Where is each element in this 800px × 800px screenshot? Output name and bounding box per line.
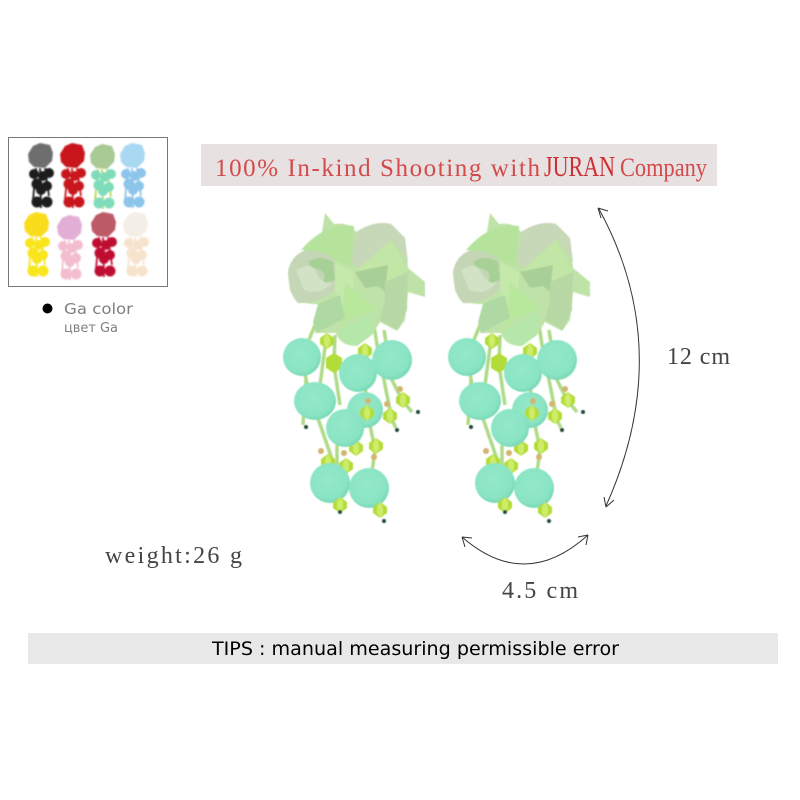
arrow: width arc	[462, 535, 588, 564]
thumbnail: black earring	[28, 143, 54, 208]
weight label: weight:26 g	[105, 543, 242, 569]
thumbnail: blue earring	[120, 143, 146, 208]
heading banner: Company	[620, 153, 707, 182]
tips bar: TIPS : manual measuring permissible error	[211, 638, 619, 660]
colour label: цвет Ga	[64, 321, 118, 336]
length label: 12 cm	[667, 344, 730, 370]
colour label	[42, 300, 134, 336]
right earring photo	[448, 213, 590, 523]
heading banner	[201, 144, 717, 186]
colour label: Ga color	[64, 300, 134, 318]
thumbnail: crimson earring	[91, 212, 117, 277]
left earring photo	[283, 213, 425, 523]
panel: colour swatch thumbnails	[8, 138, 168, 286]
arrow: length arc	[598, 208, 639, 507]
tips bar	[28, 633, 778, 664]
heading banner: JURAN	[544, 152, 615, 183]
width label: 4.5 cm	[502, 578, 578, 604]
thumbnail: green earring	[90, 144, 116, 209]
thumbnail: red earring	[60, 143, 86, 208]
thumbnail: pink earring	[57, 215, 83, 280]
heading banner: 100% In-kind Shooting with	[215, 155, 540, 182]
thumbnail: cream earring	[123, 212, 149, 277]
thumbnail: yellow earring	[24, 212, 50, 277]
